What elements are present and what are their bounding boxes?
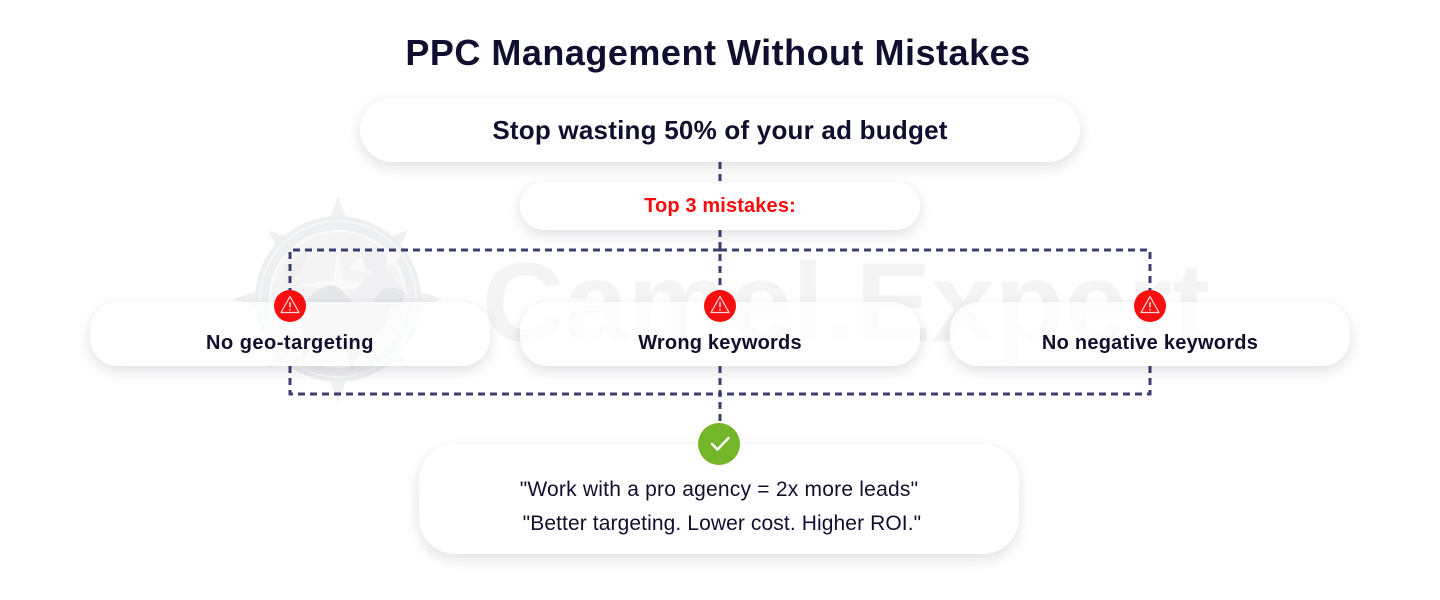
panel: solution: "Better targeting. Lower cost. Higher ROI." bbox=[523, 512, 921, 535]
panel: mistake 1 bbox=[90, 302, 490, 366]
icon: green check bbox=[698, 423, 740, 465]
panel: mistake 2 bbox=[520, 302, 920, 366]
panel: mistake 3 bbox=[950, 302, 1350, 366]
panel: mistake 1: No geo-targeting bbox=[206, 332, 374, 354]
icon: warning 1 bbox=[274, 290, 306, 322]
title: PPC Management Without Mistakes bbox=[405, 32, 1031, 73]
panel: mistake 3: No negative keywords bbox=[1042, 332, 1258, 354]
panel: mistake 2: Wrong keywords bbox=[638, 332, 802, 354]
panel: headline: Stop wasting 50% of your ad budget bbox=[492, 114, 948, 144]
icon: warning 3 bbox=[1134, 290, 1166, 322]
panel: top 3 mistakes bbox=[520, 182, 920, 230]
panel: solution: "Work with a pro agency = 2x more leads" bbox=[520, 478, 918, 501]
panel: headline bbox=[360, 98, 1080, 162]
panel: top 3 mistakes: Top 3 mistakes: bbox=[644, 194, 796, 216]
icon: warning 2 bbox=[704, 290, 736, 322]
panel: solution bbox=[419, 444, 1019, 554]
watermark: camel expert logo and wordmark: Camel.Expert bbox=[482, 240, 1210, 365]
